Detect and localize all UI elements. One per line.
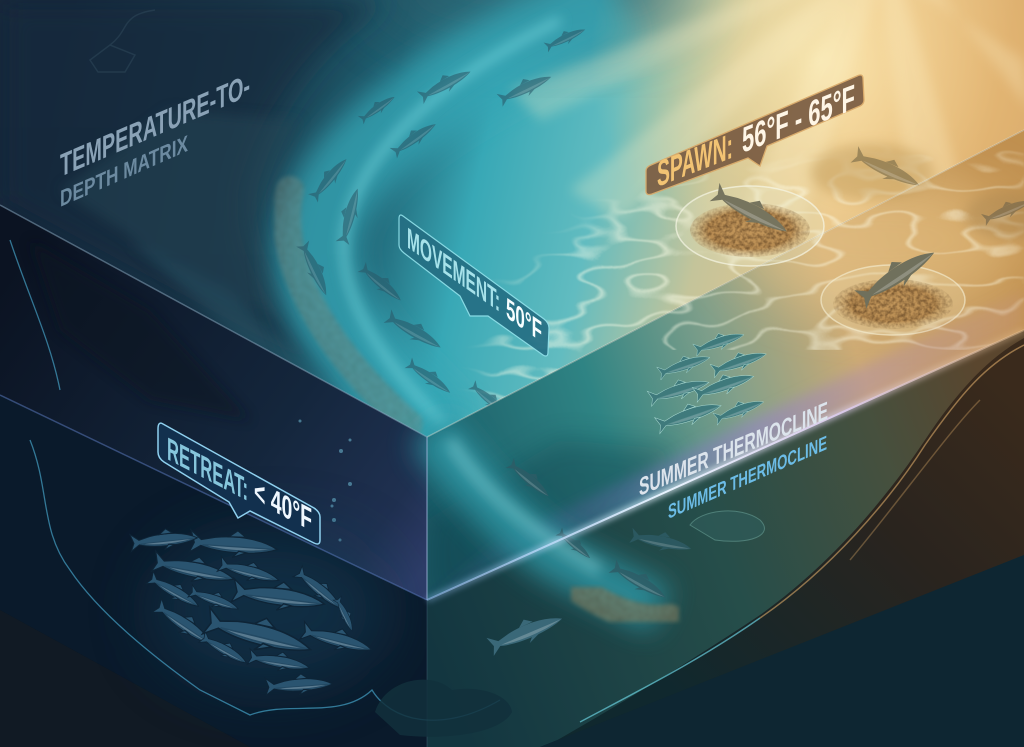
- water caustics: [470, 155, 931, 401]
- thermocline labels: SUMMER THERMOCLINE: [639, 395, 828, 502]
- callout: movement: [399, 215, 549, 356]
- brown bank: [545, 338, 1024, 747]
- dark floor bottom left: [0, 610, 250, 747]
- river bright centre: [344, 20, 560, 425]
- river gravel bed: [287, 190, 410, 425]
- small fish in river: [295, 23, 588, 420]
- panel: lake surface top face: [0, 0, 1024, 440]
- bubbles: [298, 420, 352, 542]
- fish school: retreat: [130, 526, 375, 697]
- seabed slope shadow: [427, 440, 680, 610]
- sun wash on right face: [730, 170, 1024, 310]
- title: [60, 68, 250, 213]
- thermocline labels: [639, 395, 828, 524]
- panel: nests on top surface: [676, 144, 1024, 266]
- rock ridges on bank: [69, 113, 286, 356]
- nest: upper faint: [810, 144, 934, 200]
- sun rays: [510, 0, 1024, 260]
- callout: retreat: RETREAT:: [167, 431, 248, 509]
- nest: far right: [965, 191, 1024, 239]
- title: TEMPERATURE-TO-: [60, 68, 250, 185]
- thermocline glow line: [427, 330, 1024, 600]
- bright water strand: [450, 440, 600, 570]
- river through front face: [430, 430, 693, 619]
- submerged rock texture: [120, 321, 237, 414]
- callout: spawn: [646, 75, 864, 195]
- fish school right face: [647, 326, 769, 435]
- salmon far right: [980, 193, 1024, 227]
- fish in lower river: [505, 456, 693, 605]
- dim water along top edge: [370, 0, 710, 50]
- purple band above thermocline: [550, 296, 1023, 532]
- lone fish on floor: [485, 606, 566, 657]
- nest: main: [676, 186, 824, 266]
- salmon main: [709, 180, 794, 241]
- thermocline labels: SUMMER THERMOCLINE: [668, 432, 827, 524]
- deep water glow: [150, 530, 390, 690]
- panel: below thermocline left: [0, 395, 427, 747]
- dark rocky bank at upper left: [152, 0, 378, 388]
- water caustics on right face: [662, 150, 1024, 350]
- panel: front left face: [30, 275, 427, 600]
- callout: spawn: 56°F - 65°F: [742, 76, 855, 161]
- panel: below thermocline right: [427, 330, 1024, 747]
- glowing cracks on left: [10, 240, 500, 720]
- title: DEPTH MATRIX: [60, 131, 188, 213]
- callout: spawn: SPAWN:: [657, 125, 733, 195]
- callout: movement: 50°F: [506, 291, 542, 348]
- gravel bed on front face: [580, 590, 670, 619]
- seabed rocks left: [375, 680, 512, 737]
- nest: lower right: [821, 265, 965, 335]
- salmon upper: [850, 144, 925, 194]
- callout: movement: MOVEMENT:: [407, 221, 500, 318]
- rock outline top left: [90, 10, 155, 72]
- rocks: [690, 511, 764, 541]
- panel: front right face: [427, 130, 1024, 610]
- sunlight glow: [604, 0, 987, 232]
- salmon on lower nest: [854, 252, 934, 308]
- floor bottom right: [540, 555, 1024, 747]
- glowing ridge lines right: [760, 345, 1024, 618]
- callout: retreat: < 40°F: [254, 473, 312, 539]
- river channel: [318, 0, 620, 440]
